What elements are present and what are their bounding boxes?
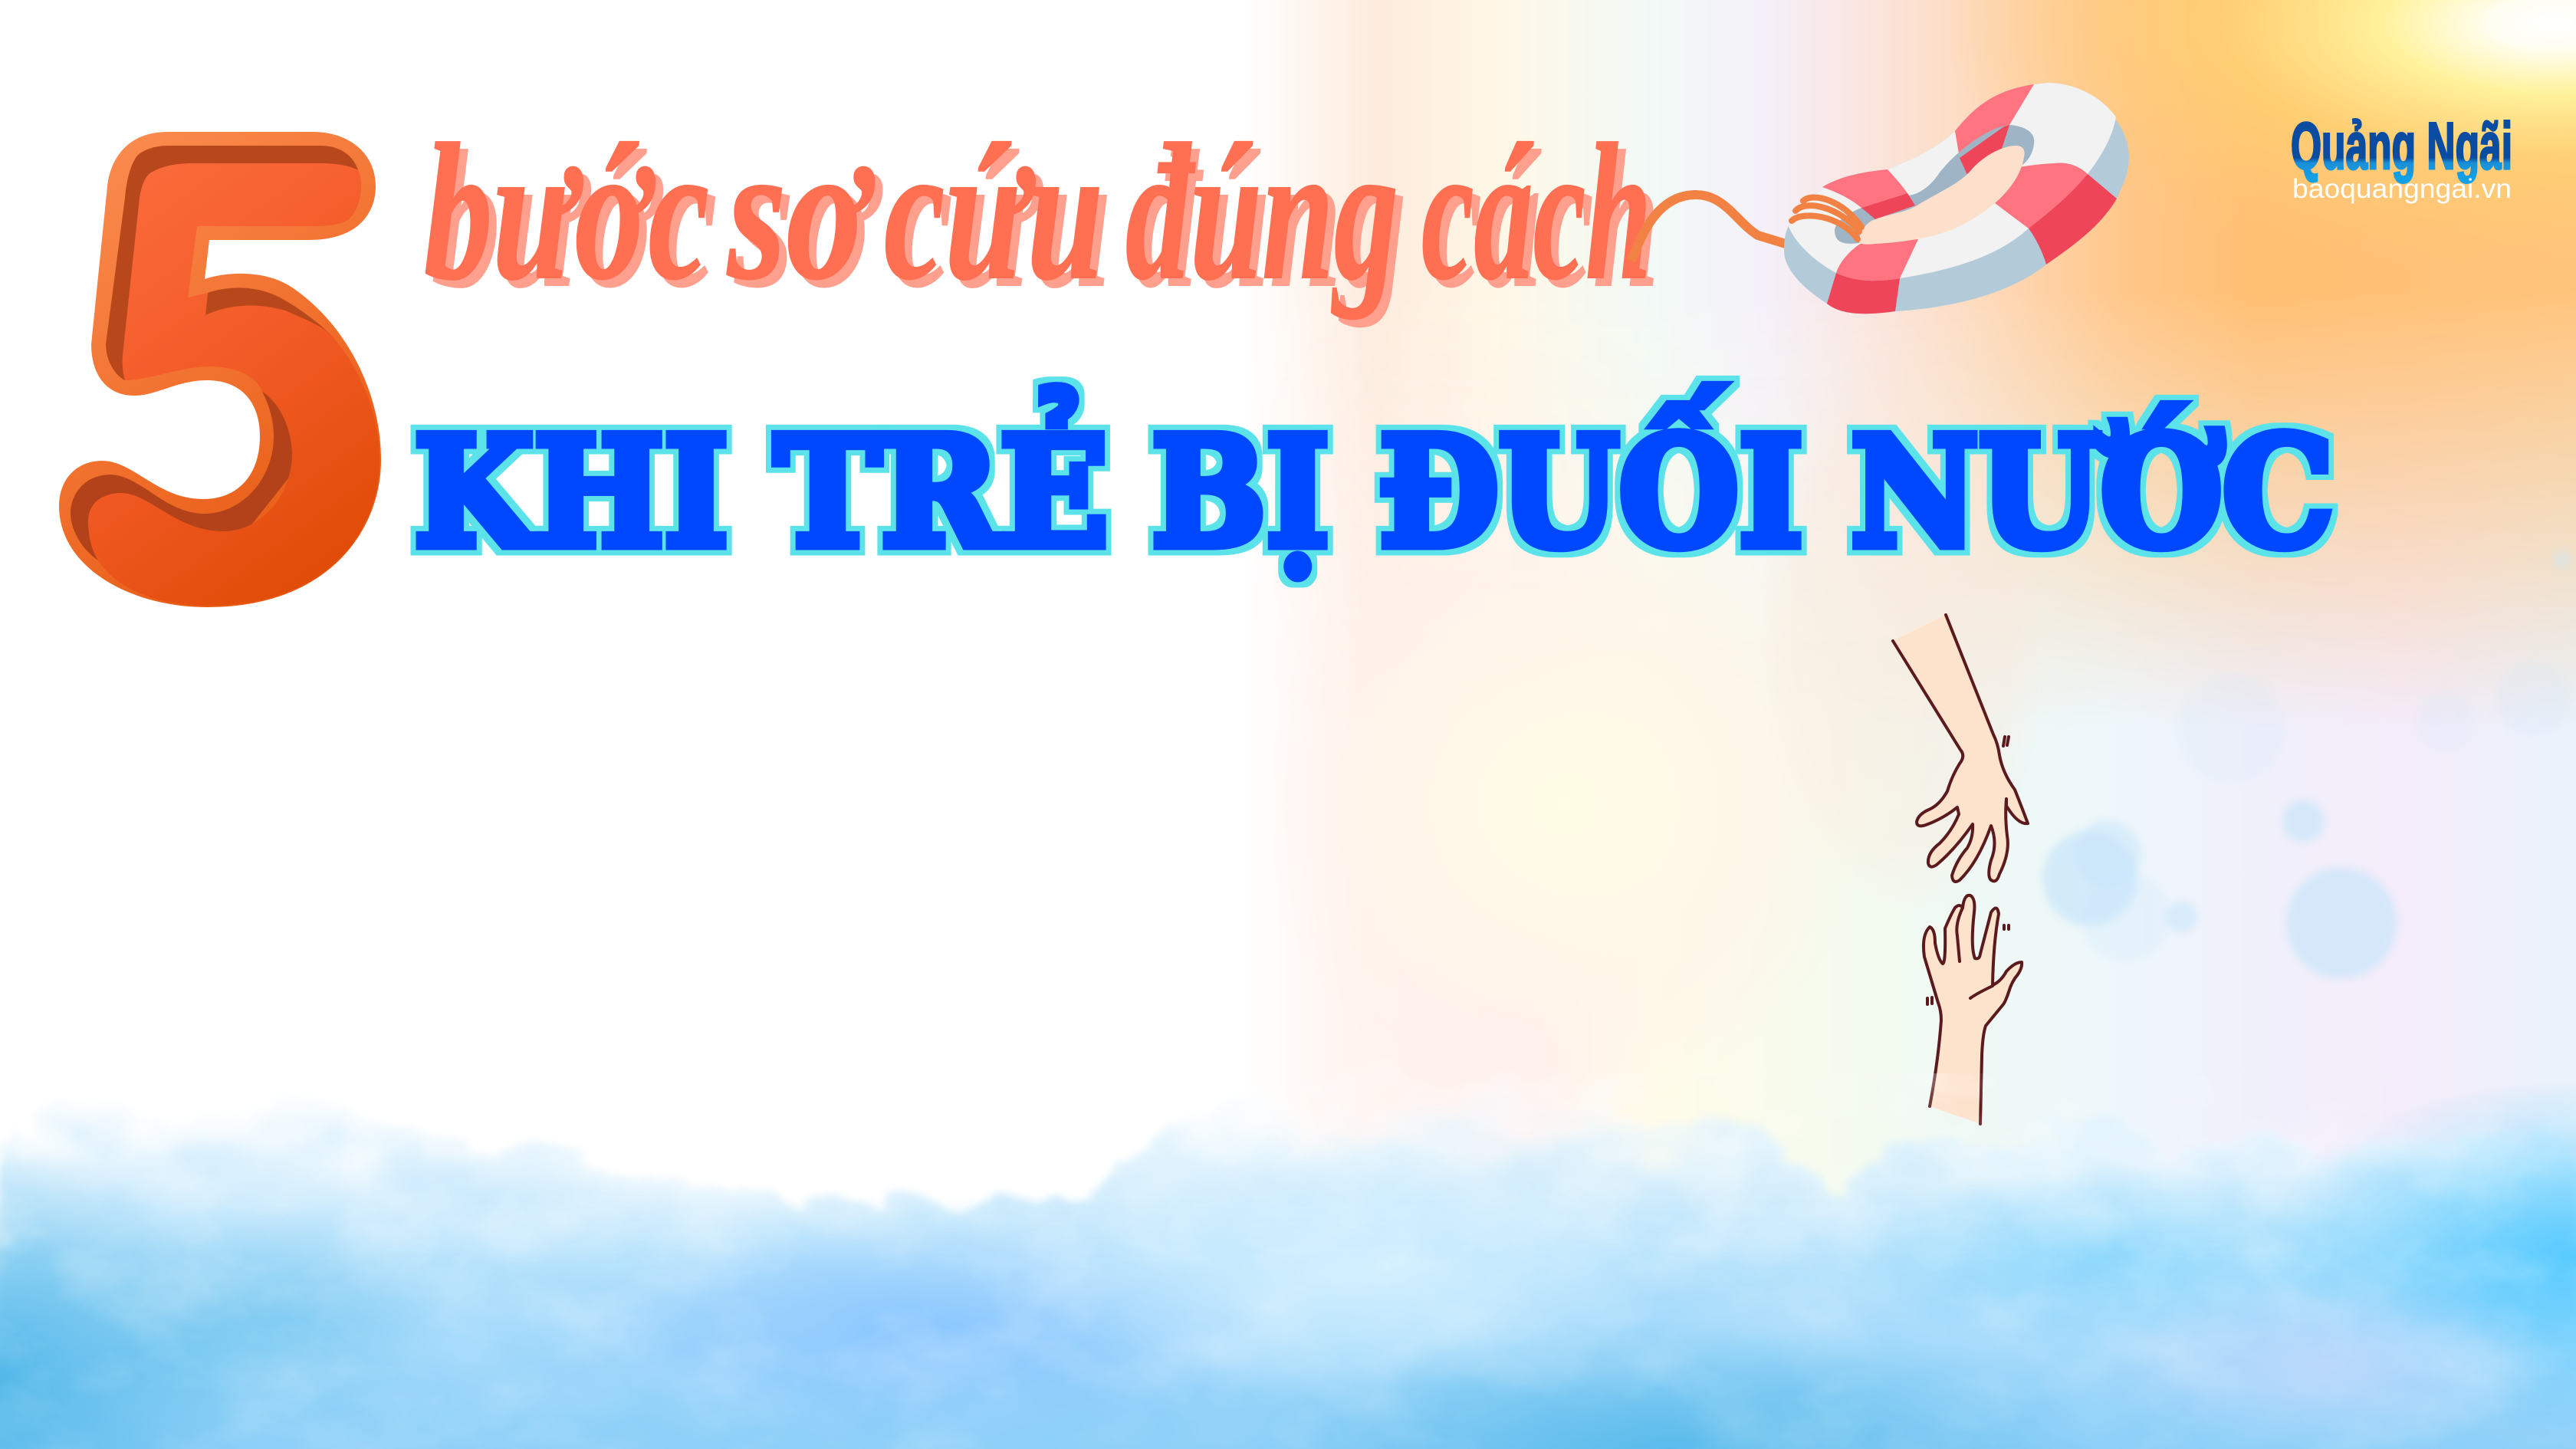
title line 2: blue heavy heading: BỊ [1152,404,1329,581]
bokeh water bubbles [2042,550,2571,978]
icon: reaching hands [1893,615,2028,1124]
logo: Quảng Ngãi newspaper [2291,110,2512,204]
ring dark red bands [1827,174,2117,314]
background: pastel rainbow wash and sun [1273,0,2576,1196]
ring pink bands [1822,84,2088,281]
rope knot [1792,197,1861,239]
title line 2: blue heavy heading: ĐUỐI [1378,386,1803,581]
title line 2: blue heavy heading [414,386,2334,581]
title line 1: script heading: đúng [1125,104,1398,320]
icon: life ring with rope [1631,83,2129,314]
ring hole [1858,146,2025,245]
ring hole wall [1835,125,2034,244]
ring top face [1789,83,2116,281]
number notch shadow band [205,288,331,360]
title line 1: script heading: cách [1421,104,1651,320]
number front face [88,163,380,606]
lower hand [1924,895,2022,1124]
title line 1: script heading: sơ [726,104,875,320]
title line 1: script heading [424,104,1651,320]
ring side [1784,83,2129,314]
logo web address: baoquangngai.vn [2292,174,2512,204]
water: watercolor waves at the bottom [0,1073,2576,1449]
title line 2: blue heavy heading: NƯỚC [1851,404,2334,581]
finger lines and motion ticks [1927,737,2009,1004]
title line 2: blue heavy heading: KHI [414,404,728,581]
title line 1: script heading: bước [424,104,709,320]
number outer rim [59,132,381,607]
upper hand [1893,615,2028,882]
title line 2: blue heavy heading: TRẺ [774,386,1109,581]
title line 1: script heading: cứu [884,104,1103,320]
ring wall red patches [1861,125,2009,219]
big number 5 [59,132,381,607]
number hole shadow band [71,392,303,560]
rope [1631,195,1786,261]
number top-left shadow band [106,146,358,380]
